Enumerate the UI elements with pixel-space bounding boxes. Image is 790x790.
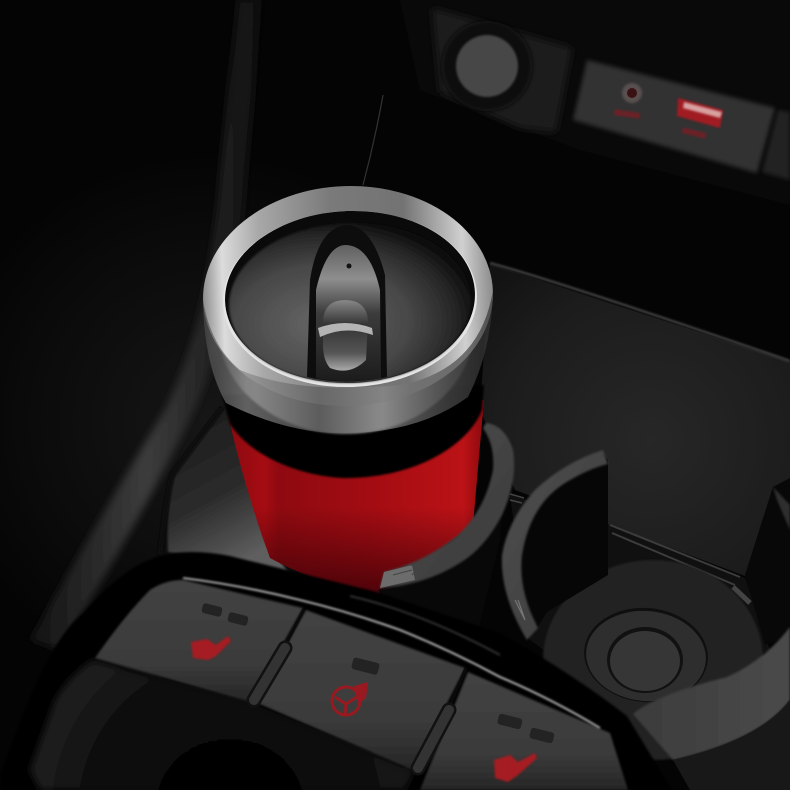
lower bezel xyxy=(30,660,413,790)
lid latch xyxy=(318,323,373,337)
lid slider xyxy=(316,245,381,381)
console side strip xyxy=(30,0,262,650)
mug red body xyxy=(228,400,484,595)
cup holder arm right xyxy=(502,450,608,640)
lid xyxy=(226,219,474,387)
rim front sides xyxy=(203,290,493,433)
seat heater key right xyxy=(420,672,628,790)
lid pocket xyxy=(323,300,368,371)
rim inner bright edge xyxy=(220,207,480,391)
right blank panel xyxy=(762,110,790,180)
rim inner shadow xyxy=(222,207,478,387)
seat heater key centre xyxy=(255,610,465,770)
gloss highlight xyxy=(183,578,600,728)
storage tray xyxy=(480,263,790,576)
lighter socket xyxy=(442,21,532,111)
steel rim front xyxy=(218,220,474,434)
icon: seat heat right xyxy=(494,753,537,782)
upper console with lighter socket and switches xyxy=(400,0,790,205)
right wall xyxy=(745,478,790,645)
lid slot xyxy=(307,225,387,382)
floor disc xyxy=(543,560,763,760)
centre button xyxy=(610,631,680,691)
seat heater key left xyxy=(95,580,303,702)
thin cable above mug xyxy=(363,95,383,185)
steel rim top xyxy=(199,181,497,411)
cup holder recess xyxy=(168,408,290,575)
travel mug xyxy=(199,181,497,595)
icon: steering heat xyxy=(332,682,368,715)
outer ring xyxy=(580,603,712,707)
key separators xyxy=(285,609,304,646)
gloss black switch panel xyxy=(0,552,672,790)
cup holder arm left xyxy=(378,423,514,632)
black band xyxy=(222,385,484,478)
icon: seat heat left xyxy=(191,636,231,660)
arm arrow xyxy=(380,565,415,588)
right trim xyxy=(633,627,790,790)
cup holder floor and button xyxy=(510,494,770,760)
socket bezel xyxy=(432,8,572,132)
switch panel xyxy=(573,60,775,173)
rail lines xyxy=(610,525,740,585)
